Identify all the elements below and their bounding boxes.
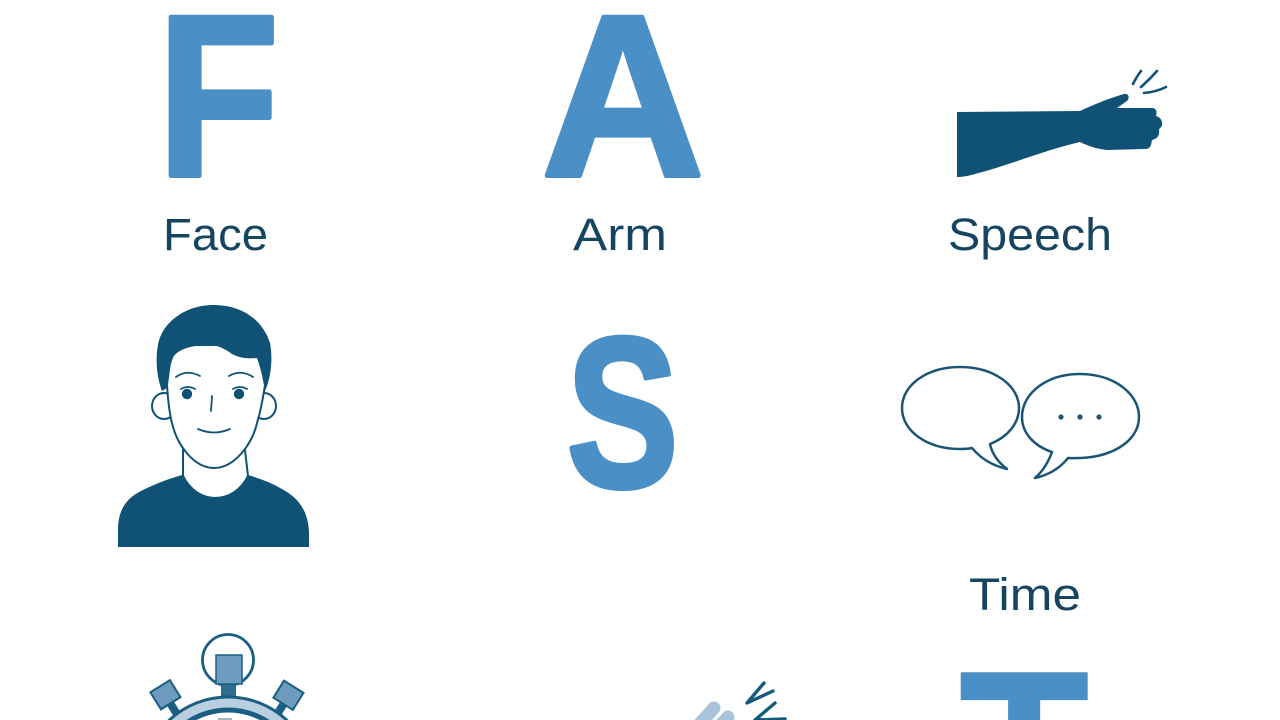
left speech bubble	[902, 367, 1019, 469]
label: Time: Time	[969, 569, 1081, 620]
neck	[183, 450, 248, 498]
light fingers	[696, 708, 728, 720]
crown button	[216, 655, 242, 684]
left side button	[150, 680, 187, 720]
icon: waving hand, partly cropped	[696, 683, 785, 720]
right ear	[252, 393, 276, 419]
eyebrows, nose and smile	[176, 373, 253, 432]
motion zigzags	[747, 683, 785, 720]
eyes	[182, 389, 244, 399]
big letter S: S	[566, 293, 679, 532]
icon: arm with fist	[957, 71, 1166, 177]
label: Face: Face	[163, 209, 268, 260]
crown loop	[202, 634, 254, 686]
hair	[157, 305, 271, 391]
shoulders and torso	[118, 475, 309, 547]
label: Speech: Speech	[948, 209, 1112, 260]
left ear	[152, 393, 176, 419]
icon: stopwatch	[142, 634, 314, 720]
right speech bubble	[1022, 374, 1139, 478]
label: Arm: Arm	[573, 209, 667, 260]
crown stem	[221, 682, 236, 698]
stopwatch outer ring	[142, 697, 314, 720]
motion lines by the hand	[1133, 71, 1166, 93]
face outline	[167, 345, 265, 468]
icon: speech bubbles	[902, 367, 1139, 478]
ellipsis dots	[1058, 414, 1102, 420]
stopwatch inner ring	[155, 710, 301, 720]
icon: person portrait	[118, 305, 309, 547]
right side button	[266, 681, 303, 720]
dial marker	[218, 718, 232, 720]
